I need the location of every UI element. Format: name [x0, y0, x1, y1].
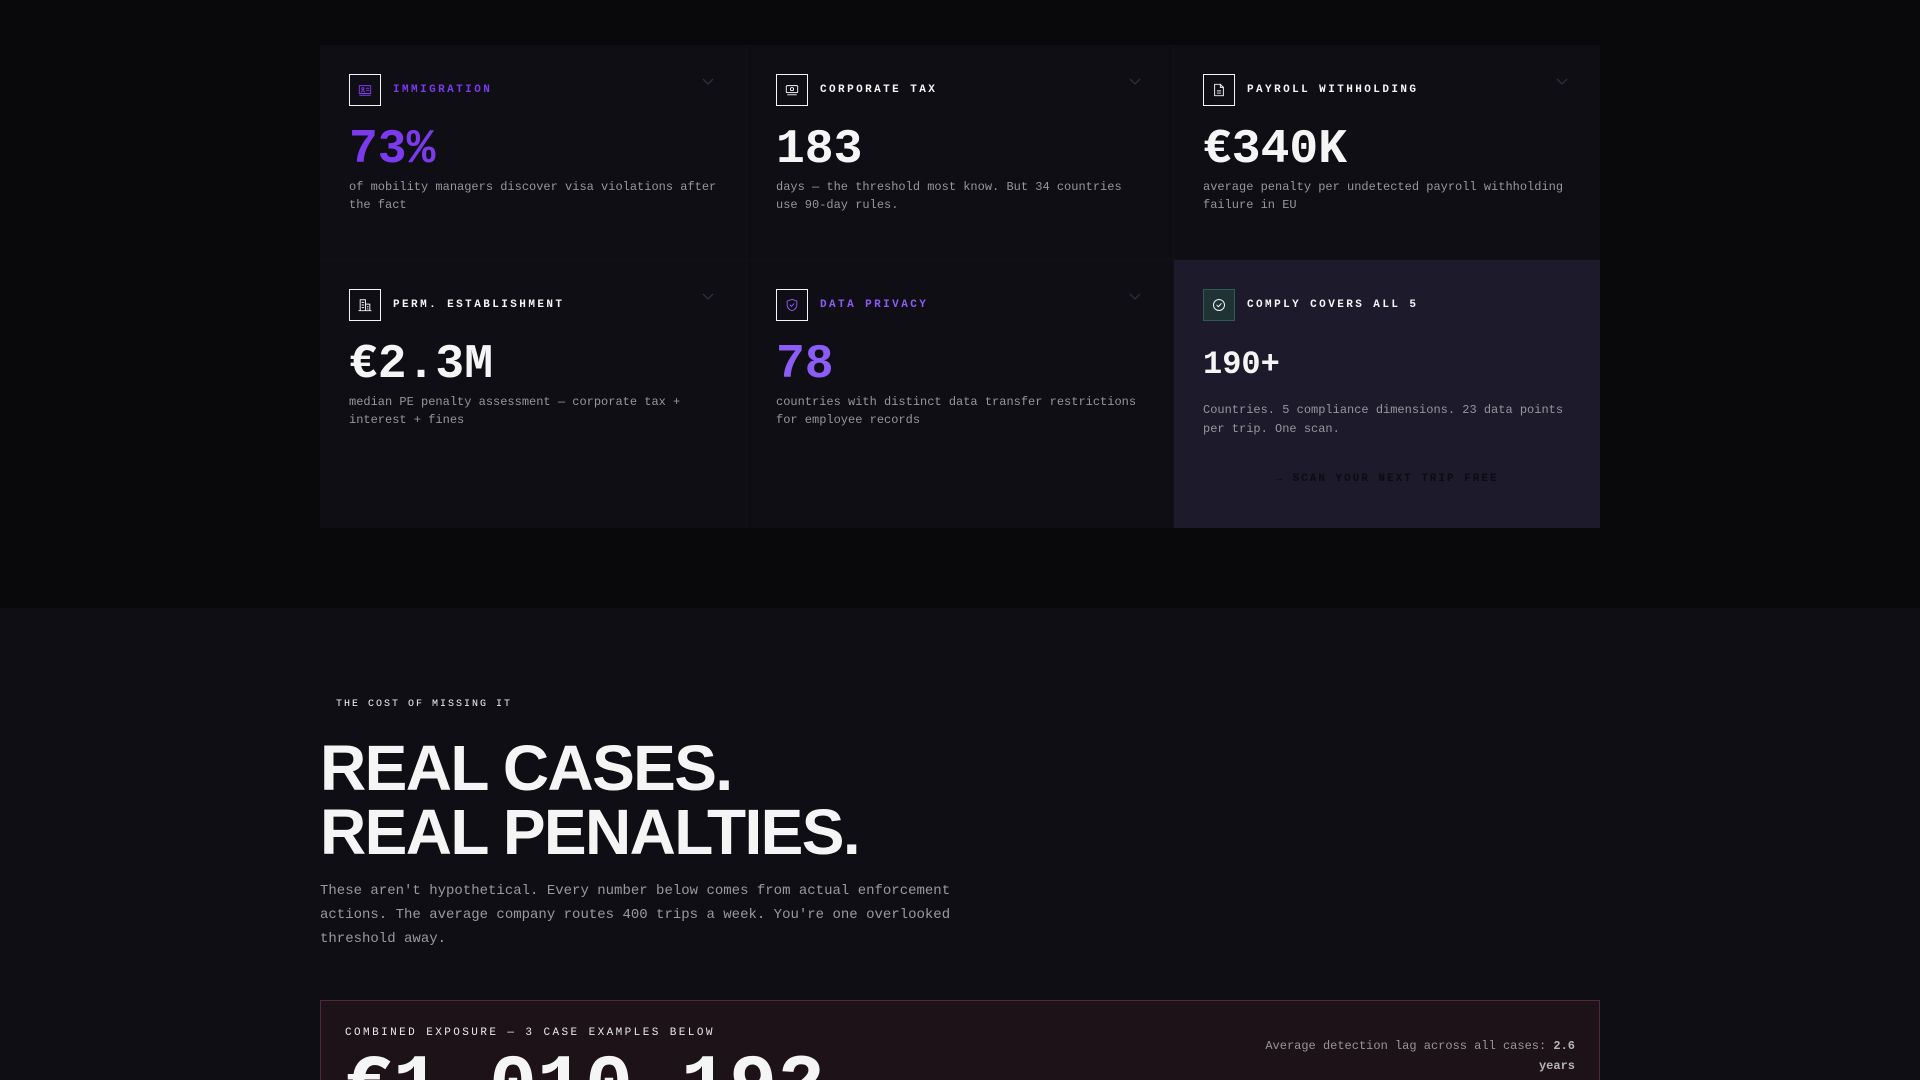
label: DATA PRIVACY — [820, 299, 928, 311]
label: PAYROLL WITHHOLDING — [1247, 84, 1418, 96]
panel: immigration — [320, 45, 746, 259]
detection lag note: years — [1539, 1059, 1575, 1073]
icon: chevron — [702, 78, 714, 85]
heading: REAL CASES. — [320, 732, 732, 804]
icon: id card — [349, 74, 381, 106]
icon: chevron — [1556, 78, 1568, 85]
icon: building — [349, 289, 381, 321]
description: of mobility managers discover visa violations after — [349, 180, 716, 194]
heading: REAL PENALTIES. — [320, 796, 859, 868]
description — [776, 180, 1122, 212]
description: per trip. One scan. — [1203, 422, 1340, 436]
intro paragraph: actions. The average company routes 400 trips a week. You're one overlooked — [320, 907, 950, 923]
stat: €2.3M — [349, 338, 493, 392]
panel: data privacy — [747, 260, 1173, 528]
description: failure in EU — [1203, 198, 1297, 212]
label: CORPORATE TAX — [820, 84, 937, 96]
stat: 183 — [776, 123, 862, 177]
eyebrow: THE COST OF MISSING IT — [336, 699, 512, 710]
description: Countries. 5 compliance dimensions. 23 data points — [1203, 403, 1563, 417]
description — [1203, 403, 1563, 436]
description: average penalty per undetected payroll withholding — [1203, 180, 1563, 194]
stat: €340K — [1203, 123, 1347, 177]
panel: combined exposure — [320, 1000, 1600, 1080]
icon: chevron — [1130, 78, 1140, 85]
description: interest + fines — [349, 413, 464, 427]
panel: compliance dimensions grid — [320, 45, 1600, 528]
icon: shield — [776, 289, 808, 321]
description — [349, 395, 680, 427]
icon: chevron — [1130, 294, 1140, 300]
panel: payroll withholding — [1174, 45, 1600, 259]
icon: document — [1203, 74, 1235, 106]
panel: permanent establishment — [320, 260, 746, 528]
label: IMMIGRATION — [393, 84, 492, 96]
description: countries with distinct data transfer restrictions — [776, 395, 1136, 409]
lower section background — [0, 608, 1920, 1080]
stat: 190+ — [1203, 346, 1280, 382]
description — [1203, 180, 1563, 212]
heading — [320, 732, 859, 868]
call to action: → SCAN YOUR NEXT TRIP FREE — [1275, 473, 1499, 485]
intro paragraph: These aren't hypothetical. Every number below comes from actual enforcement — [320, 883, 950, 899]
panel: corporate tax — [747, 45, 1173, 259]
detection lag note: Average detection lag across all cases: 2.6 — [1265, 1039, 1575, 1053]
intro paragraph: threshold away. — [320, 931, 446, 947]
detection lag note — [1265, 1039, 1575, 1073]
description: for employee records — [776, 413, 920, 427]
description: use 90-day rules. — [776, 198, 898, 212]
description: days — the threshold most know. But 34 countries — [776, 180, 1122, 194]
label: COMPLY COVERS ALL 5 — [1247, 299, 1418, 311]
icon: banknote — [776, 74, 808, 106]
icon: check circle — [1203, 289, 1235, 321]
description: the fact — [349, 198, 407, 212]
label: COMBINED EXPOSURE — 3 CASE EXAMPLES BELOW — [345, 1027, 715, 1039]
description — [349, 180, 716, 212]
stat: 73% — [349, 123, 435, 177]
stat: 78 — [776, 338, 834, 392]
icon: chevron — [702, 294, 714, 300]
description: median PE penalty assessment — corporate tax + — [349, 395, 680, 409]
description — [776, 395, 1136, 427]
intro paragraph — [320, 883, 950, 947]
label: PERM. ESTABLISHMENT — [393, 299, 564, 311]
panel: comply covers all 5 — [1174, 260, 1600, 528]
